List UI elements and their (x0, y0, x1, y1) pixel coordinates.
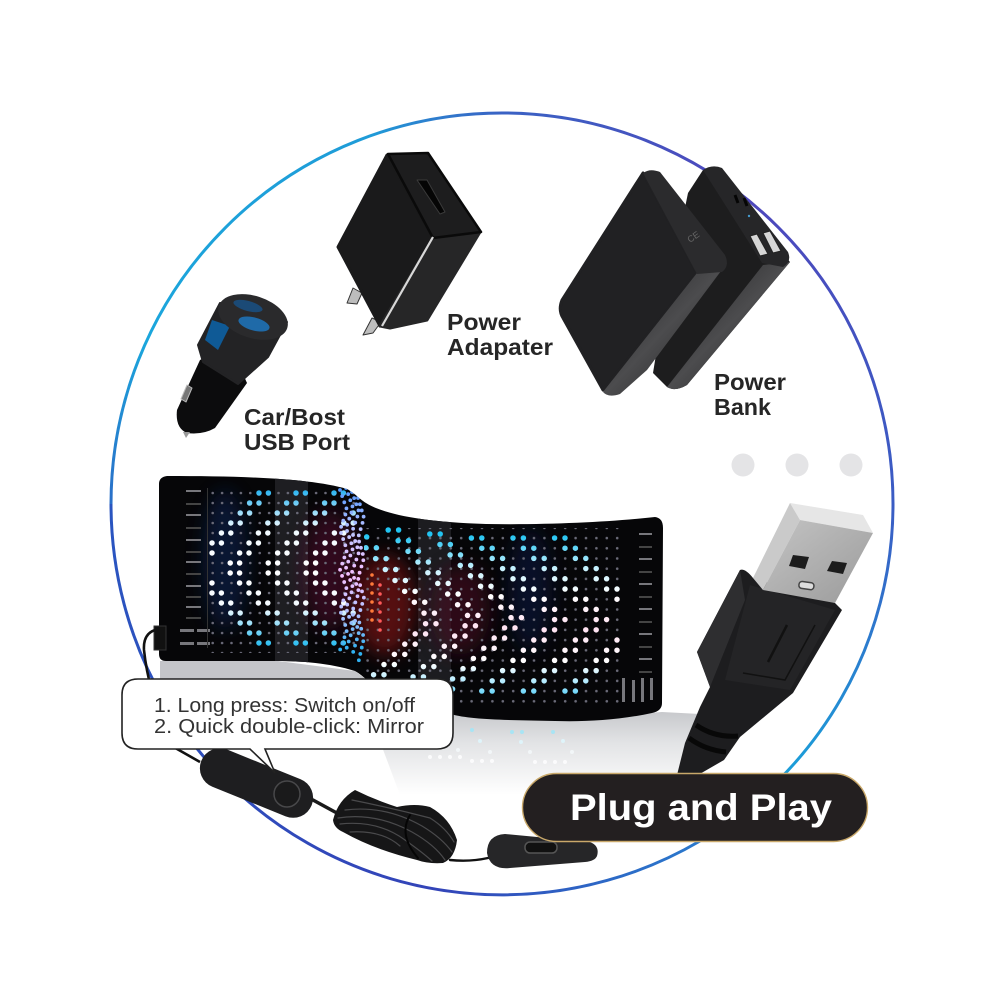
inline USB-C switch (487, 834, 598, 868)
callout text: 2. Quick double-click: Mirror (154, 716, 424, 738)
inline switch with button (194, 742, 319, 824)
label: Power Bank (714, 369, 786, 420)
callout text: 1. Long press: Switch on/off (154, 695, 415, 717)
back power bank (653, 166, 790, 389)
icon: power banks (560, 166, 790, 396)
cable coil (313, 790, 488, 863)
front power bank: CE (685, 229, 701, 245)
LED display area (196, 478, 620, 703)
label: Power Adapater (447, 309, 553, 360)
panel cable (144, 630, 200, 762)
badge: Plug and Play: Plug and Play (570, 787, 832, 828)
panel connector (154, 626, 166, 650)
right chevrons (364, 527, 620, 694)
label: Car/Bost USB Port (244, 404, 350, 455)
badge: Plug and Play (522, 774, 868, 842)
gradient circle outline (111, 113, 893, 895)
icon: USB-A plug (677, 503, 873, 775)
label: Power Bank: Power (714, 369, 786, 395)
label: Power Adapater: Power (447, 309, 521, 335)
plug body (677, 570, 842, 775)
metal shell (790, 503, 873, 533)
panel body (159, 476, 663, 721)
label: Car/Bost USB Port: Car/Bost (244, 404, 345, 430)
right circuit markings (622, 533, 653, 702)
icon: car USB charger (177, 286, 294, 438)
front power bank (560, 170, 727, 396)
label: Car/Bost USB Port: USB Port (244, 429, 350, 455)
flexible LED panel (154, 476, 663, 721)
carousel dots (732, 454, 862, 476)
left chevrons (209, 490, 356, 646)
label: Power Adapater: Adapater (447, 334, 553, 360)
panel reflection (160, 661, 700, 795)
left circuit markings (180, 488, 210, 648)
icon: power adapter (338, 153, 481, 335)
orange centre LEDs (372, 575, 380, 635)
callout text (154, 695, 424, 738)
fold dense LEDs (340, 488, 364, 664)
label: Power Bank: Bank (714, 394, 771, 420)
callout (122, 679, 453, 773)
